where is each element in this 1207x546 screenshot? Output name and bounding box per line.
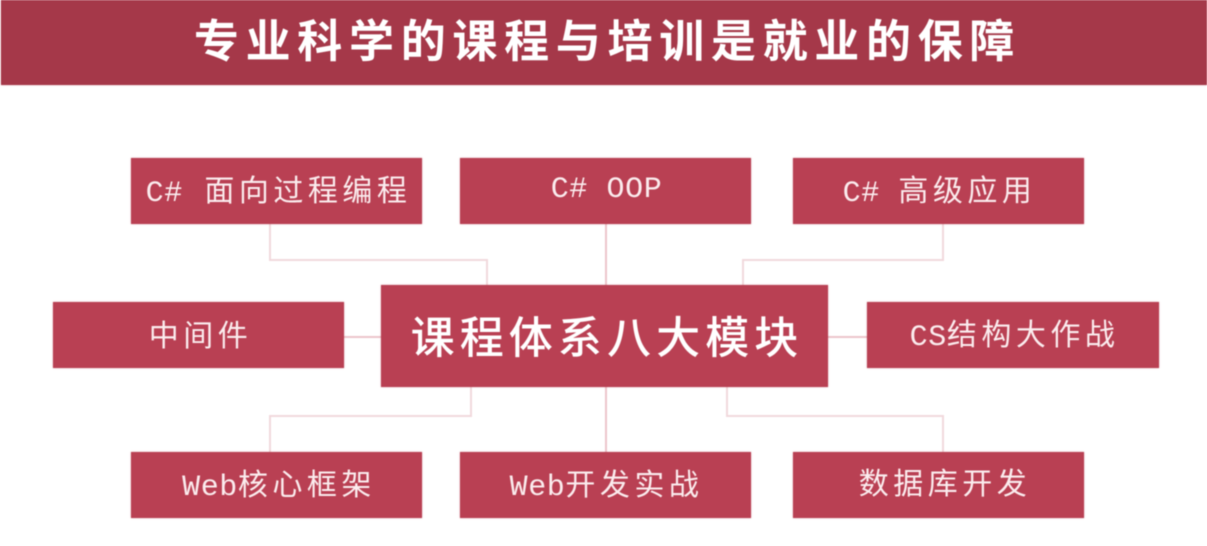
module: 数据库开发 (793, 452, 1084, 518)
module: C# 面向过程编程: C# 面向过程编程 (146, 175, 411, 211)
module: 中间件 (53, 302, 344, 368)
module: C# OOP: C# OOP (551, 172, 662, 206)
module: C# OOP (460, 158, 751, 224)
module: Web开发实战: Web开发实战 (510, 469, 703, 505)
module: C# 高级应用 (793, 158, 1084, 224)
module: 数据库开发: 数据库开发 (859, 468, 1031, 500)
module: C# 高级应用: C# 高级应用 (843, 175, 1036, 211)
module: CS结构大作战 (867, 302, 1159, 368)
module: Web开发实战 (460, 452, 751, 518)
center hub: 课程体系八大模块: 课程体系八大模块 (411, 314, 803, 363)
center hub: 课程体系八大模块 (381, 285, 828, 387)
module: CS结构大作战: CS结构大作战 (910, 319, 1119, 355)
module: C# 面向过程编程 (131, 158, 422, 224)
title banner: 专业科学的课程与培训是就业的保障 (194, 16, 1021, 66)
title banner (1, 0, 1207, 85)
module: Web核心框架 (131, 452, 422, 518)
module: 中间件: 中间件 (149, 320, 252, 352)
module: Web核心框架: Web核心框架 (182, 469, 376, 505)
